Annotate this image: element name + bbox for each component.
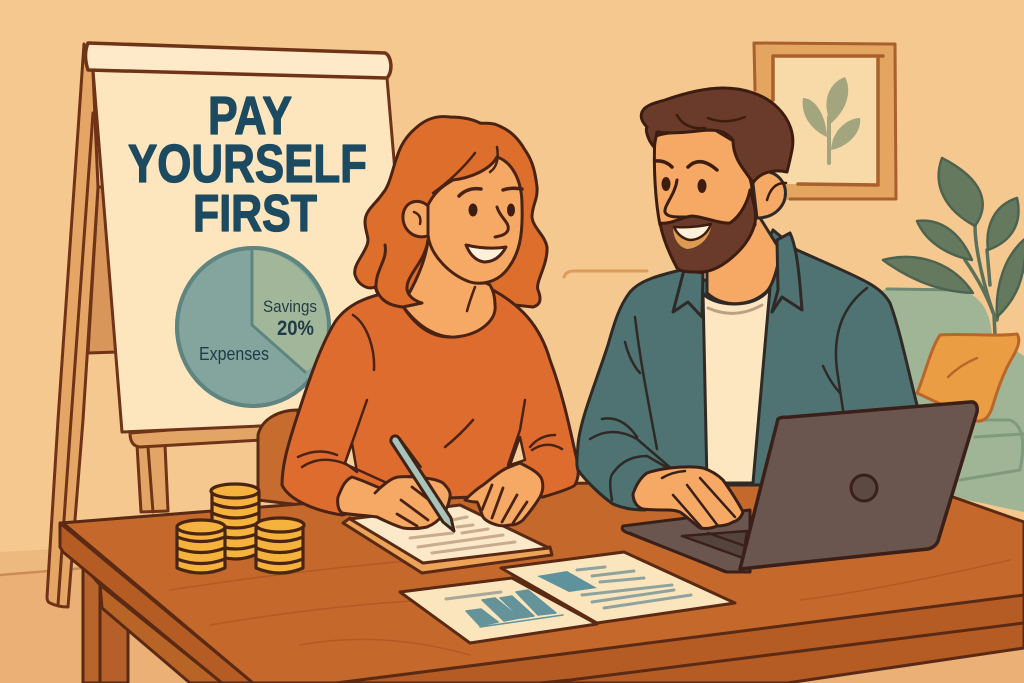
pie chart: Savings [263, 297, 317, 316]
woman resting hand [465, 463, 543, 526]
man hair [641, 88, 793, 183]
man ear [752, 171, 785, 218]
man face [654, 130, 755, 225]
woman hands [338, 463, 543, 529]
pie chart [177, 248, 329, 406]
table [60, 482, 1024, 683]
notebook [343, 505, 552, 573]
heading: PAY [208, 86, 292, 146]
heading: FIRST [193, 185, 317, 243]
flip chart easel [47, 43, 400, 607]
woman face [427, 157, 522, 283]
table top [61, 482, 1024, 683]
heading [128, 86, 367, 243]
woman sweater [282, 290, 578, 515]
armchair [860, 289, 1024, 512]
easel back wedge [88, 187, 118, 353]
man neck [707, 213, 780, 304]
report with text lines [501, 552, 735, 623]
chart top roll [86, 43, 391, 78]
easel front leg [47, 44, 98, 607]
report with bar chart [400, 578, 597, 643]
pie chart: 20% [277, 317, 314, 340]
man [577, 88, 920, 510]
wall picture frame with leaf [754, 43, 896, 200]
man t-shirt [703, 288, 770, 483]
chart paper [93, 70, 400, 432]
man facial features [655, 161, 786, 249]
pie chart: Expenses [199, 344, 269, 364]
laptop lid [740, 402, 977, 569]
woman [282, 117, 578, 515]
woman ear [403, 201, 428, 237]
table front band [336, 592, 1024, 683]
table legs [83, 565, 222, 683]
wooden chair back [258, 410, 300, 505]
heading: YOURSELF [128, 134, 367, 194]
sweater gaps [345, 437, 525, 472]
woman neck [402, 240, 495, 337]
man hand [633, 467, 743, 529]
orange cushion [917, 334, 1019, 421]
woman writing hand [338, 477, 450, 529]
man beard [660, 190, 756, 272]
easel tray and back legs [130, 423, 262, 512]
left coin stack [177, 520, 225, 573]
shirt creases and cuff [590, 288, 867, 500]
back coin stack [211, 484, 259, 559]
pen [391, 436, 454, 531]
laptop logo [847, 471, 881, 505]
laptop base [622, 510, 750, 572]
man collar [673, 233, 802, 317]
table side band [60, 523, 253, 683]
man shirt [577, 230, 920, 510]
gold coin stacks [177, 484, 304, 573]
woman hair back [355, 117, 547, 307]
woman hair lock [375, 235, 422, 307]
woman facial features [433, 147, 522, 262]
potted plant leaves [883, 158, 1024, 335]
sweater creases [298, 315, 562, 483]
right coin stack [256, 518, 304, 573]
